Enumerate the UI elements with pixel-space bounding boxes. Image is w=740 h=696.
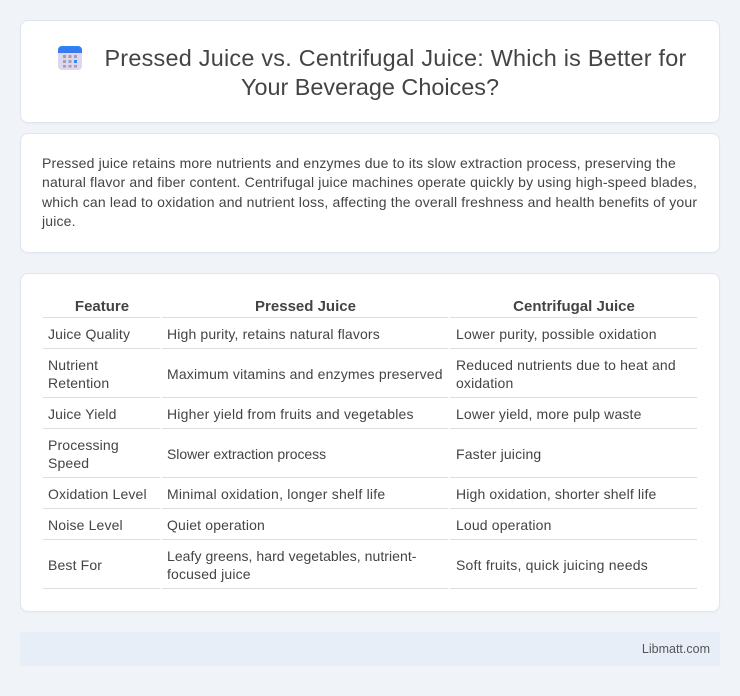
intro text: juice. [42,213,76,229]
row: Nutrient Retention: Reduced nutrients due to heat and [456,357,676,373]
row: Juice Yield: Lower yield, more pulp waste [456,406,642,422]
row: Best For: focused juice [167,566,251,582]
title [104,45,687,100]
table headers [75,298,635,315]
panel: title card [20,20,720,123]
row: Nutrient Retention: oxidation [456,375,513,391]
row: Nutrient Retention: Maximum vitamins and enzymes preserved [167,366,443,382]
row: Juice Quality: High purity, retains natural flavors [167,326,380,342]
row: Noise Level: Quiet operation [167,517,265,533]
title: Pressed Juice vs. Centrifugal Juice: Which is Better for [104,45,687,71]
row: Nutrient Retention: Nutrient [48,357,98,373]
intro text: natural flavor and fiber content. Centrifugal juice machines operate quickly by using high-speed blades, [42,174,697,190]
panel: intro card [20,133,720,253]
row: Oxidation Level: Oxidation Level [48,486,147,502]
row: Juice Quality [48,326,657,342]
footer bar [20,632,720,666]
title: Your Beverage Choices? [241,74,499,100]
table headers: Feature [75,298,129,315]
row: Best For [48,548,648,582]
row: Best For: Leafy greens, hard vegetables, nutrient- [167,548,416,564]
row: Noise Level: Noise Level [48,517,123,533]
row: Noise Level [48,517,552,533]
row: Noise Level: Loud operation [456,517,552,533]
row: Processing Speed: Processing [48,437,119,453]
intro text: Pressed juice retains more nutrients and enzymes due to its slow extraction process, preserving the [42,154,676,170]
panel: comparison table card [20,273,720,612]
row: Processing Speed [48,437,541,471]
table headers: Pressed Juice [255,298,356,315]
intro text [42,154,697,229]
row: Oxidation Level [48,486,656,502]
row: Processing Speed: Faster juicing [456,446,541,462]
row: Nutrient Retention: Retention [48,375,109,391]
intro text: which can lead to oxidation and nutrient loss, affecting the overall freshness and health benefits of your [42,194,697,210]
icon: calendar [58,46,82,70]
row: Juice Quality: Lower purity, possible oxidation [456,326,657,342]
row: Best For: Soft fruits, quick juicing needs [456,557,648,573]
row: Nutrient Retention [48,357,676,391]
row: Best For: Best For [48,557,102,573]
row: Oxidation Level: High oxidation, shorter shelf life [456,486,656,502]
row: Juice Yield [48,406,642,422]
row: Oxidation Level: Minimal oxidation, longer shelf life [167,486,385,502]
footer text: Libmatt.com [642,642,710,656]
row: Juice Yield: Juice Yield [48,406,117,422]
table headers: Centrifugal Juice [513,298,635,315]
row: Juice Quality: Juice Quality [48,326,130,342]
row: Processing Speed: Speed [48,455,89,471]
row: Processing Speed: Slower extraction process [167,446,326,462]
row: Juice Yield: Higher yield from fruits and vegetables [167,406,414,422]
